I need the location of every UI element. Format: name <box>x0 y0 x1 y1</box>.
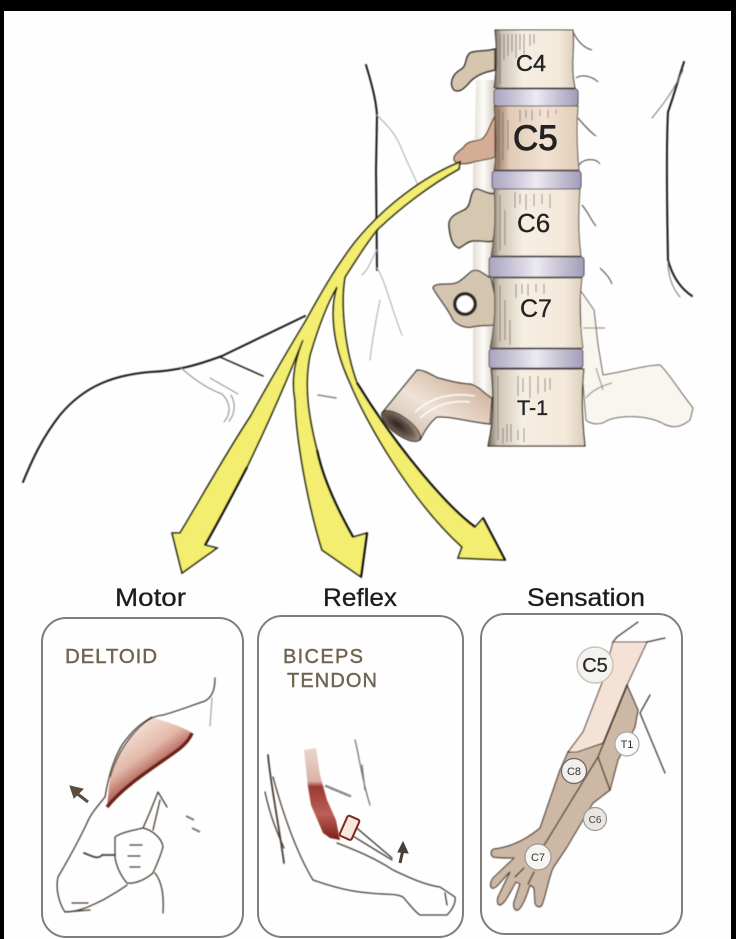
T1 marker: T1 <box>621 739 633 751</box>
T1 rib <box>382 370 492 440</box>
C6 marker <box>584 808 606 830</box>
reflex hammer <box>339 815 360 840</box>
rib end opening <box>377 405 425 447</box>
vertebra hatching <box>498 34 556 444</box>
dermatome arm tan <box>491 685 638 910</box>
right-side nerve squiggles <box>573 32 612 284</box>
vertebra C5 <box>494 106 579 170</box>
vertebra labels: C7 <box>520 295 552 323</box>
transverse process C5 <box>454 116 495 164</box>
spine column <box>377 30 693 447</box>
illustration: body outline <box>23 62 692 482</box>
transverse process C4 <box>452 49 495 91</box>
vertebra labels: C6 <box>517 208 550 238</box>
panel title: BICEPS TENDON: TENDON <box>287 670 377 692</box>
C5 marker <box>577 647 613 683</box>
transverse process C7 <box>433 270 496 327</box>
C7 marker <box>525 844 551 870</box>
heading: Sensation: Sensation <box>527 584 645 612</box>
arrow shadow edges <box>205 383 505 577</box>
right-side facets and T1 rib <box>580 290 693 427</box>
yellow nerve arrows <box>172 162 505 577</box>
vertebra T1 <box>488 369 585 446</box>
spinal cord tube <box>473 80 494 400</box>
C7 marker: C7 <box>531 852 545 864</box>
C8 marker <box>562 758 586 784</box>
vertebra labels: C5 <box>513 119 558 158</box>
panel title: BICEPS TENDON <box>283 646 377 692</box>
C5 marker: C5 <box>582 655 608 677</box>
intervertebral discs <box>489 89 584 368</box>
forearm outline <box>265 740 455 915</box>
heading: Reflex: Reflex <box>323 584 398 612</box>
T1 marker <box>615 732 639 756</box>
vertebra labels: T-1 <box>517 396 548 420</box>
biceps muscle <box>304 748 340 840</box>
deltoid muscle <box>107 717 192 807</box>
arm and fist outline <box>57 678 215 913</box>
panel: reflex biceps tendon <box>258 616 463 937</box>
foramen of C7 <box>453 292 477 316</box>
motion arrow <box>70 786 88 802</box>
C6 marker: C6 <box>589 815 602 826</box>
vertebra C7 <box>490 278 583 348</box>
transverse process C6 <box>449 189 496 248</box>
vertebra labels <box>513 50 558 420</box>
arrow: motor, reflex and sensation branches <box>172 162 505 577</box>
panel: motor deltoid <box>42 618 243 937</box>
C8 marker: C8 <box>567 766 581 778</box>
arm lines <box>515 622 665 884</box>
vertebra C6 <box>491 189 581 256</box>
panel: sensation dermatomes <box>481 614 682 934</box>
panel title: BICEPS TENDON: BICEPS <box>283 646 363 668</box>
dermatome C5 pink band <box>568 642 647 752</box>
vertebra C4 <box>494 30 575 88</box>
smudge marks <box>186 816 200 832</box>
panel title: DELTOID: DELTOID <box>65 645 157 668</box>
motion arrow <box>398 842 408 863</box>
heading: Motor: Motor <box>115 584 186 612</box>
vertebra labels: C4 <box>516 50 546 76</box>
